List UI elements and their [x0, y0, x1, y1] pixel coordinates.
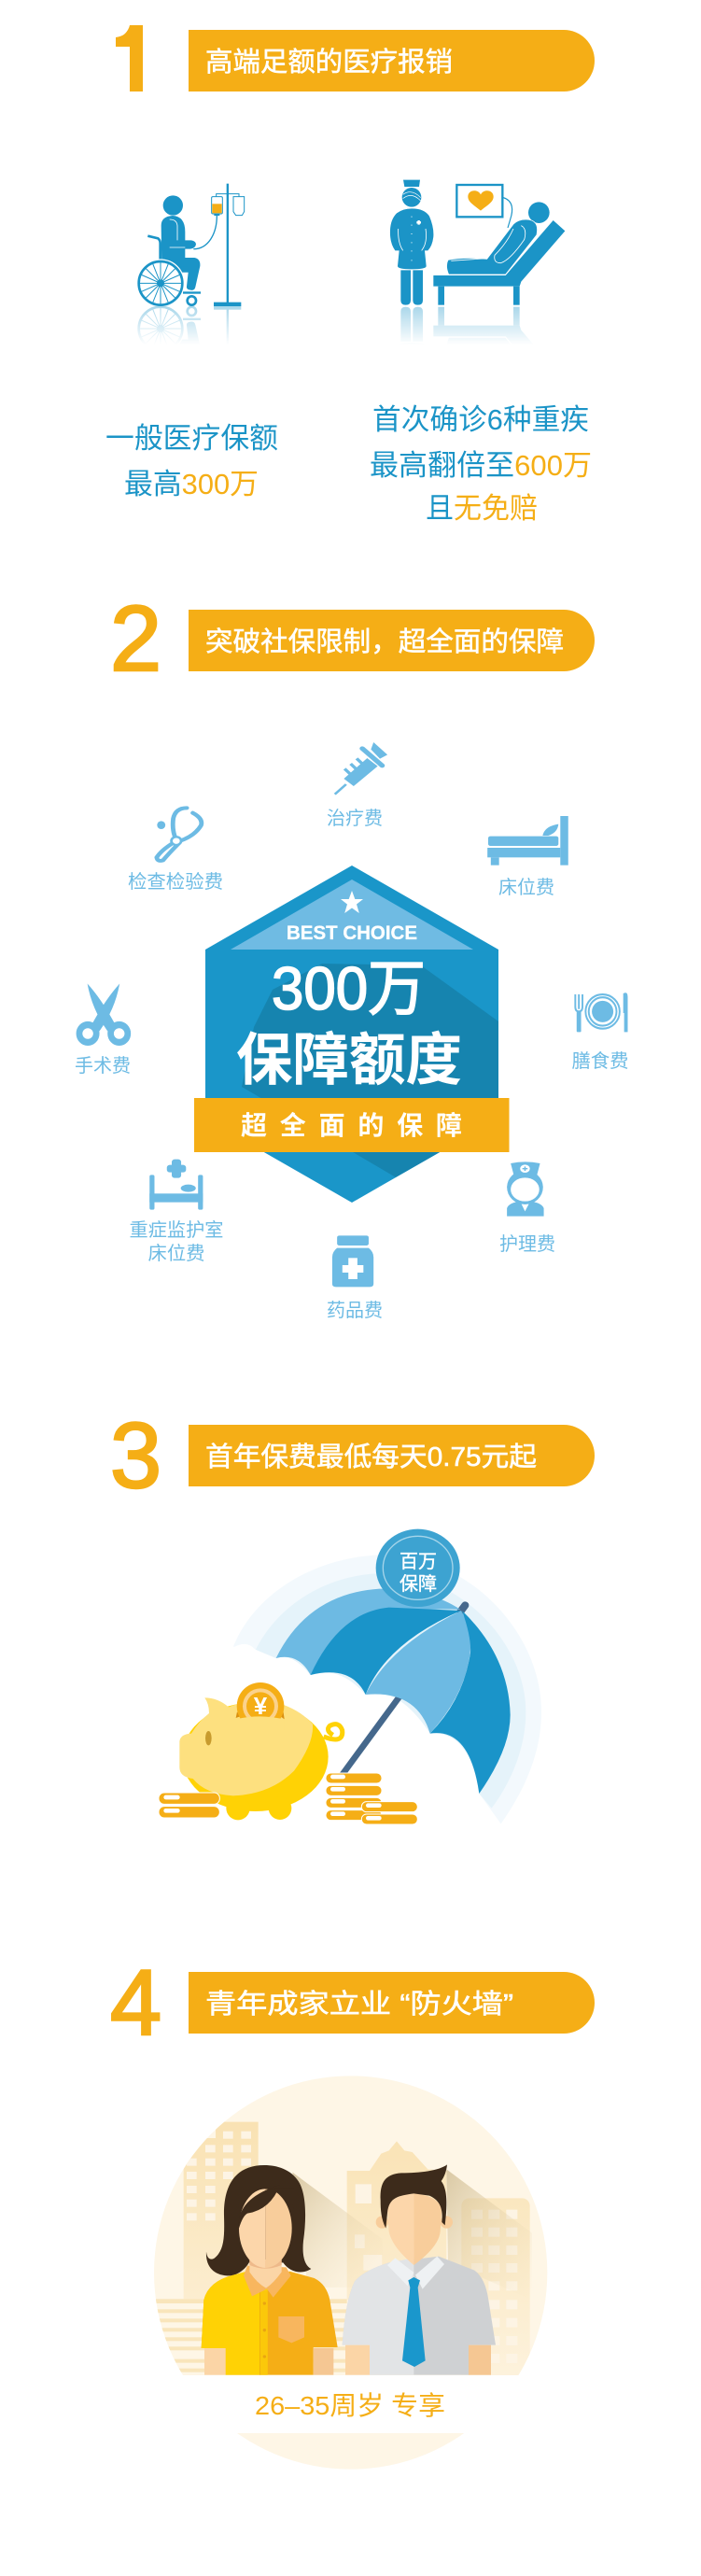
icon: patient on bed [433, 202, 565, 305]
text block: general coverage: 最高300万 [124, 468, 259, 500]
long shadows [292, 2172, 366, 2287]
label: treatment fee: 治疗费 [327, 808, 383, 829]
icon: nurse head [507, 1161, 544, 1217]
label: nursing fee: 护理费 [499, 1233, 555, 1255]
label: surgery fee: 手术费 [75, 1055, 131, 1077]
section 3: low premium [110, 1403, 595, 1842]
coin stacks [159, 1773, 417, 1824]
icon: syringe [335, 742, 387, 795]
coverage label: 保障额度 [236, 1028, 462, 1091]
orange banner [194, 1098, 510, 1152]
heading pill 4 [189, 1972, 595, 2034]
best choice: BEST CHOICE [287, 922, 417, 944]
label: ICU bed fee: 床位费 [147, 1243, 205, 1264]
amount: 300万 [272, 954, 426, 1022]
star [341, 891, 363, 913]
yen sign on coin: ¥ [254, 1692, 268, 1720]
label: ICU bed fee: 重症监护室 [129, 1219, 224, 1241]
illustration: couple in front of the city [140, 2076, 560, 2470]
icon: scissors [79, 984, 128, 1042]
icon: plate and cutlery [575, 992, 627, 1032]
number 2: 2 [110, 586, 161, 690]
badge text: 百万 [400, 1552, 437, 1572]
top ribbon triangle [231, 880, 473, 950]
icon: stethoscope [157, 808, 202, 861]
section 1: medical reimbursement [105, 7, 595, 525]
icon: medicine bottle [332, 1235, 373, 1287]
text block: critical illness coverage: 最高翻倍至600万 [370, 449, 592, 482]
background circle [154, 2076, 547, 2470]
badge text: 保障 [400, 1573, 437, 1595]
illustration: wheelchair patient and bedridden patient with nurse [137, 179, 566, 341]
icon: ICU bed [149, 1160, 203, 1210]
icon: patient in wheelchair with IV drip [136, 184, 245, 307]
number 1: 1 [107, 7, 160, 111]
heading pill 2: 突破社保限制，超全面的保障 [205, 626, 564, 657]
icon: bed [487, 816, 568, 866]
caption: age range: 26–35周岁 专享 [255, 2391, 445, 2420]
heading pill 3 [189, 1425, 595, 1486]
label: meal fee: 膳食费 [571, 1050, 629, 1072]
city buildings [154, 2122, 532, 2391]
text block: critical illness coverage [370, 403, 592, 525]
badge text [400, 1552, 437, 1595]
badge: million coverage [376, 1529, 460, 1607]
orange banner: 超全面的保障 [241, 1111, 462, 1140]
label: examination fee: 检查检验费 [128, 871, 223, 893]
man [343, 2164, 496, 2375]
heading pill 1: 高端足额的医疗报销 [205, 47, 453, 77]
section 2: comprehensive coverage [75, 586, 629, 1321]
heading pill 3: 首年保费最低每天0.75元起 [205, 1442, 537, 1472]
text block: critical illness coverage: 且无免赔 [426, 492, 538, 525]
piggy bank [179, 1682, 343, 1820]
heading pill 2 [189, 610, 595, 671]
text block: critical illness coverage: 首次确诊6种重疾 [372, 403, 589, 436]
umbrella handle [343, 1696, 400, 1775]
icon: heart monitor [456, 185, 512, 228]
label: ICU bed fee [129, 1219, 224, 1264]
section 4: young families [110, 1950, 595, 2470]
reflection under the figures [137, 306, 530, 341]
icon: nurse [390, 180, 433, 305]
text block: general coverage [105, 422, 278, 500]
number 4: 4 [110, 1950, 161, 2054]
umbrella canopy [276, 1589, 511, 1794]
woman [202, 2165, 338, 2375]
illustration: umbrella over piggy bank [159, 1529, 541, 1842]
text block: general coverage: 一般医疗保额 [105, 422, 278, 455]
white band behind caption [140, 2375, 560, 2433]
number 1 [116, 25, 143, 91]
heading pill 4: 青年成家立业 “防火墙” [205, 1989, 513, 2020]
label: bed fee: 床位费 [498, 877, 554, 898]
umbrella halo [231, 1555, 541, 1842]
label: medicine fee: 药品费 [327, 1300, 383, 1321]
number 3: 3 [110, 1403, 161, 1507]
heading pill 1 [189, 30, 595, 91]
long shadow [242, 964, 498, 1177]
badge: 300万 coverage hexagon [194, 866, 510, 1203]
